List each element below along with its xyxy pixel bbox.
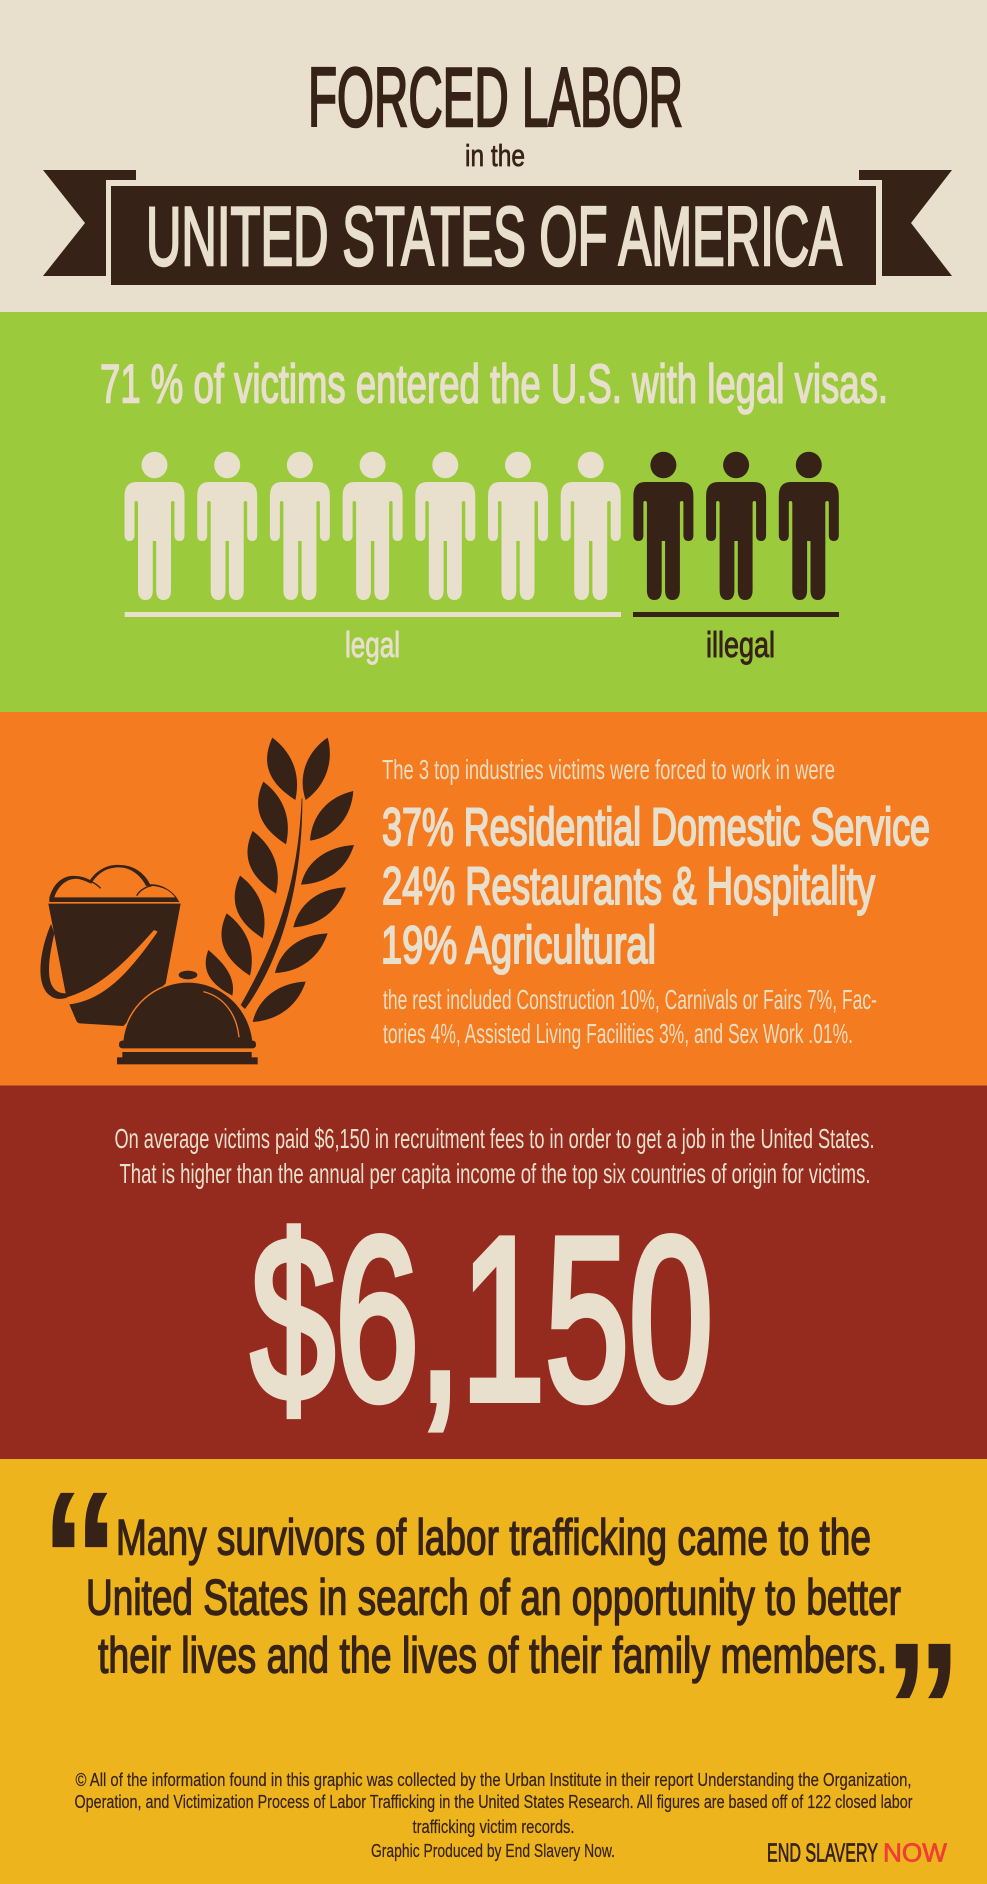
icon: bucket bbox=[41, 865, 181, 1026]
logo: end slavery now: END SLAVERY bbox=[767, 1840, 878, 1868]
icons: bucket, wheat and cloche bbox=[41, 738, 354, 1064]
quote mark: open: “ bbox=[41, 1451, 119, 1666]
bar: legal bbox=[125, 612, 621, 617]
panel: legal visas bbox=[0, 312, 987, 712]
footnote bbox=[74, 1769, 912, 1861]
icon: wheat bbox=[206, 738, 354, 1022]
panel: quote bbox=[0, 1451, 987, 1884]
footnote: trafficking victim records. bbox=[412, 1816, 574, 1837]
text: fees explanation bbox=[114, 1123, 874, 1189]
ribbon banner bbox=[43, 170, 952, 285]
label: illegal: illegal bbox=[706, 624, 775, 665]
stat: 6,150 dollars: $6,150 bbox=[251, 1190, 713, 1449]
bar: illegal bbox=[633, 612, 839, 617]
text: remaining industries bbox=[383, 984, 877, 1049]
logo: end slavery now: NOW bbox=[883, 1840, 947, 1868]
pictogram: three illegal people bbox=[633, 452, 839, 600]
footnote: Graphic Produced by End Slavery Now. bbox=[371, 1840, 615, 1861]
subtitle: in the: in the bbox=[465, 138, 525, 173]
panel: industries bbox=[0, 712, 987, 1086]
stat: agricultural: 19% Agricultural bbox=[381, 916, 656, 975]
panel: header bbox=[0, 0, 987, 312]
label: legal: legal bbox=[345, 624, 400, 665]
quote mark: close: ” bbox=[884, 1602, 962, 1817]
panel: recruitment fees bbox=[0, 1086, 987, 1459]
icon: cloche bbox=[117, 971, 258, 1064]
pictogram: seven legal people bbox=[124, 452, 621, 600]
title: forced labor: FORCED LABOR bbox=[308, 50, 683, 144]
quote text bbox=[86, 1508, 901, 1684]
